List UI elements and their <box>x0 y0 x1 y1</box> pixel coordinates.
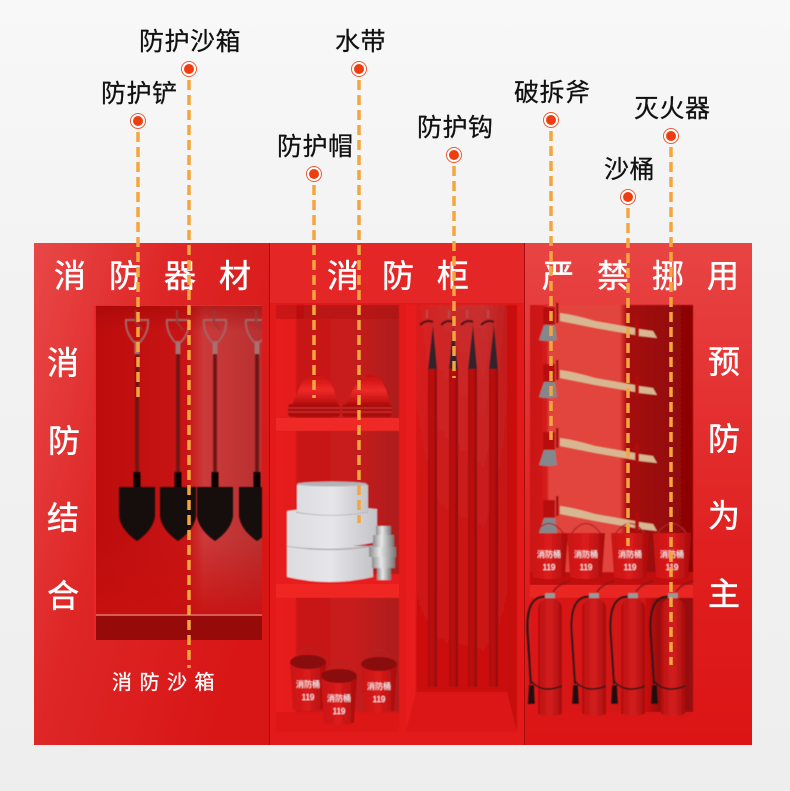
heading: 严禁挪用: 挪 <box>652 258 684 294</box>
heading: 严禁挪用 <box>542 258 739 294</box>
heading: 消防器材: 器 <box>164 258 196 294</box>
callout: 防护沙箱: 防护沙箱 <box>139 28 241 56</box>
text: 预防为主 vertical: 防 <box>708 421 740 457</box>
shelf <box>276 418 399 431</box>
heading: 严禁挪用: 严 <box>542 258 574 294</box>
callout: 沙桶: 沙桶 <box>604 156 655 184</box>
text: 消防结合 vertical: 合 <box>47 578 79 614</box>
compartment: axes and buckets <box>530 303 693 585</box>
heading: 消防器材 <box>54 258 251 294</box>
heading: 消防柜: 防 <box>382 258 414 294</box>
compartment: extinguishers <box>527 581 693 732</box>
callout: 沙桶 <box>604 156 655 546</box>
callout: 防护钩 <box>417 114 494 378</box>
callout: 灭火器: 灭火器 <box>634 95 711 123</box>
callout: 防护帽 <box>277 133 354 398</box>
compartment: sand buckets <box>276 598 399 732</box>
callout: 防护钩: 防护钩 <box>417 114 494 142</box>
heading: 消防器材: 消 <box>54 258 86 294</box>
heading: 消防器材: 防 <box>109 258 141 294</box>
text: 消防结合 vertical <box>47 345 80 614</box>
hose coupling <box>369 526 396 580</box>
callout: 灭火器 <box>634 95 711 665</box>
heading: 消防器材: 材 <box>219 258 251 294</box>
text: 预防为主 vertical: 为 <box>708 498 740 534</box>
callout: 防护铲 <box>101 80 178 398</box>
text: 消防结合 vertical: 防 <box>48 423 80 459</box>
heading: 消防柜 <box>327 258 469 294</box>
compartment: helmets <box>276 305 399 418</box>
panel: middle cabinet <box>270 243 524 745</box>
text: 预防为主 vertical: 预 <box>708 344 740 380</box>
callout: 水带 <box>335 28 386 523</box>
callout: 防护帽: 防护帽 <box>277 133 354 161</box>
text: 预防为主 vertical: 主 <box>708 576 740 612</box>
panel: left cabinet <box>34 243 275 745</box>
text: 消防沙箱: 消防沙箱 <box>112 671 222 694</box>
shovels <box>119 310 275 541</box>
text: 消防结合 vertical: 结 <box>47 500 79 536</box>
heading: 严禁挪用: 用 <box>707 258 739 294</box>
shelf <box>530 585 693 598</box>
callout: 破拆斧: 破拆斧 <box>514 79 591 107</box>
compartment: hose rolls <box>276 431 399 584</box>
hook poles <box>420 310 498 687</box>
heading: 消防柜: 消 <box>327 258 359 294</box>
callout: 破拆斧 <box>514 79 591 440</box>
compartment: protective hooks <box>406 305 517 732</box>
shelf <box>276 584 399 598</box>
callout: 防护沙箱 <box>139 28 241 668</box>
text: 预防为主 vertical <box>708 344 740 612</box>
heading: 严禁挪用: 禁 <box>597 258 629 294</box>
panel: right cabinet <box>525 243 752 745</box>
callout: 防护铲: 防护铲 <box>101 80 178 108</box>
heading: 消防柜: 柜 <box>437 258 469 294</box>
text: 消防结合 vertical: 消 <box>47 345 79 381</box>
callout: 水带: 水带 <box>335 28 386 56</box>
